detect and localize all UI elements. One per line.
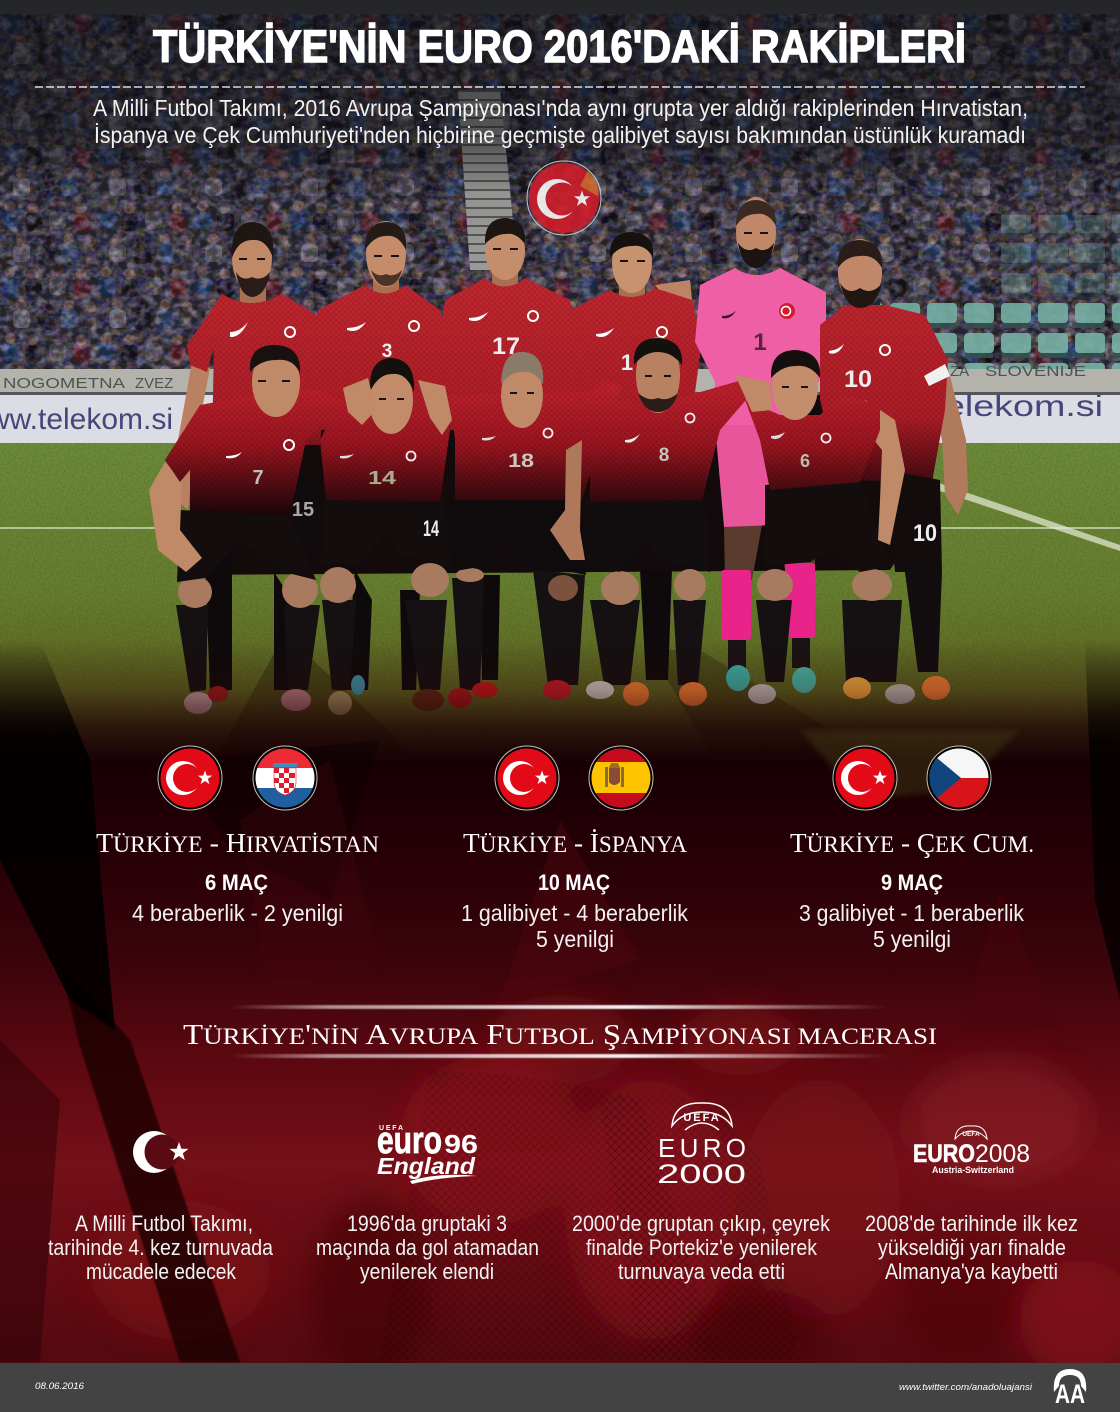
player: front row 2 <box>320 358 452 690</box>
history text: 2008: Almanya'ya kaybetti <box>885 1259 1058 1284</box>
flag: Spain <box>589 746 653 810</box>
flag: Turkey <box>158 746 222 810</box>
logo: UEFA Euro 2000: 2000 <box>657 1159 746 1189</box>
logo: UEFA Euro 96 England: 96 <box>444 1129 478 1159</box>
history text: Turkey: A Milli Futbol Takımı, <box>75 1211 253 1236</box>
history text: 1996 <box>316 1211 539 1284</box>
player: back row 2 <box>317 221 444 430</box>
player: goalkeeper in pink: 1 <box>753 329 767 356</box>
heading: TÜRKİYE - ÇEK CUM. <box>790 828 1034 858</box>
history text: Turkey: tarihinde 4. kez turnuvada <box>48 1235 274 1260</box>
results: 4 beraberlik - 2 yenilgi <box>132 900 343 926</box>
central Turkish flag badge <box>527 161 601 235</box>
player: goalkeeper in pink <box>695 197 826 670</box>
advertising boards: SLOVENIJE <box>985 363 1086 380</box>
stadium photo background <box>0 0 1120 783</box>
logo: UEFA Euro 96 England: UEFA <box>379 1125 403 1132</box>
match count: 6 MAÇ <box>205 870 268 895</box>
player: back row 4 <box>570 232 700 406</box>
player: back row 3 <box>438 218 577 430</box>
faded player silhouettes <box>90 995 1120 1380</box>
player: front row 1 <box>149 345 342 692</box>
results: 3 galibiyet - 1 beraberlik <box>799 900 1024 926</box>
intro text: İspanya ve Çek Cumhuriyeti'nden hiçbirine geçmişte galibiyet sayısı bakımından üstünlük kuramadı <box>94 122 1026 148</box>
intro text: A Milli Futbol Takımı, 2016 Avrupa Şampiyonası'nda aynı grupta yer aldığı rakiplerinden Hırvatistan, <box>93 95 1028 121</box>
match count: 9 MAÇ <box>881 870 943 895</box>
history text: 1996: 1996'da gruptaki 3 <box>347 1211 507 1236</box>
logo: Anadolu Agency <box>1054 1369 1086 1409</box>
player shorts number: rear left <box>293 502 314 516</box>
dashed divider <box>35 86 1085 88</box>
logo: UEFA Euro 2000: EURO <box>658 1133 746 1163</box>
logo: UEFA Euro 2008 <box>913 1126 1030 1176</box>
match column: Türkiye - İspanya: 5 yenilgi <box>536 926 614 952</box>
player: back row 3: 17 <box>492 333 520 360</box>
logo: UEFA Euro 2008: UEFA <box>962 1131 980 1138</box>
player: front row 5 <box>735 350 905 682</box>
advertising boards: .telekom.si <box>923 390 1103 423</box>
logo: UEFA Euro 2000 <box>657 1103 746 1189</box>
advertising boards: NOGOMETNA <box>3 375 125 392</box>
logo: UEFA Euro 2008: 2008 <box>975 1140 1030 1168</box>
match column: Türkiye - Çek Cum. <box>790 746 1034 952</box>
history text: 2000: finalde Portekiz'e yenilerek <box>586 1235 818 1260</box>
section heading: TÜRKİYE 'NİN AVRUPA FUTBOL ŞAMPİYONASI MACERASI <box>183 1020 937 1051</box>
player: front row 4: 8 <box>659 445 669 466</box>
intro text <box>93 95 1028 148</box>
player: front row 2: 14 <box>368 468 396 488</box>
torso mass behind players <box>180 395 935 575</box>
date: 08.06.2016 <box>35 1381 85 1392</box>
flag: Czech Republic <box>925 746 991 810</box>
logo: Anadolu Agency: AA <box>1055 1379 1085 1409</box>
player: back row 1 <box>176 222 328 510</box>
player: back row captain <box>820 239 968 672</box>
player: front row 2: 14 <box>423 516 439 541</box>
history text: 1996: yenilerek elendi <box>360 1259 494 1284</box>
football boots row <box>184 665 950 715</box>
player: front row 4 <box>585 337 746 685</box>
results: 1 galibiyet - 4 beraberlik <box>461 900 688 926</box>
heading: TÜRKİYE - İSPANYA <box>463 828 687 858</box>
match count: 10 MAÇ <box>538 870 610 895</box>
crowd in the stands <box>0 0 1120 372</box>
history text: Turkey <box>48 1211 274 1284</box>
twitter url: www.twitter.com/anadoluajansi <box>899 1382 1033 1393</box>
logo: UEFA Euro 96 England <box>377 1120 478 1184</box>
advertising boards: ZA <box>950 363 969 380</box>
player: front row 1: 7 <box>252 467 264 489</box>
advertising boards: ZVEZ <box>135 375 173 392</box>
logo: UEFA Euro 2008: EURO <box>913 1140 975 1168</box>
history text: Turkey: mücadele edecek <box>86 1259 237 1284</box>
match column: Türkiye - Hırvatistan <box>96 746 379 926</box>
logo: UEFA Euro 2000: UEFA <box>683 1112 721 1124</box>
player: front row 5: 6 <box>800 451 810 471</box>
match column: Türkiye - İspanya <box>461 746 688 952</box>
match column: Türkiye - Çek Cum.: 5 yenilgi <box>873 926 951 952</box>
advertising boards <box>0 363 1120 444</box>
player shorts number: rear left: 15 <box>292 499 314 521</box>
player: back row 4: 1 <box>621 350 633 375</box>
history text: 2008 <box>865 1211 1078 1284</box>
footer bar <box>0 1363 1120 1412</box>
history text: 2008: yükseldiği yarı finalde <box>878 1235 1066 1260</box>
logo: UEFA Euro 2008: Austria-Switzerland <box>932 1165 1014 1176</box>
football pitch <box>0 443 1120 783</box>
history text: 2000 <box>572 1211 831 1284</box>
lower red background with faded silhouettes <box>0 640 1120 1380</box>
player: back row captain: 10 <box>844 366 872 393</box>
flag: Turkey <box>833 746 897 810</box>
history text: 2008: 2008'de tarihinde ilk kez <box>865 1211 1078 1236</box>
player: front row 3: 18 <box>508 451 534 472</box>
title: TÜRKİYE'NİN EURO 2016'DAKİ RAKİPLERİ <box>153 21 966 72</box>
logo: UEFA Euro 96 England: England <box>377 1153 476 1179</box>
history text: 2000: 2000'de gruptan çıkıp, çeyrek <box>572 1211 831 1236</box>
player: front row 3 <box>450 352 622 690</box>
icon: Turkish crescent and star <box>133 1131 188 1173</box>
history text: 1996: maçında da gol atamadan <box>316 1235 539 1260</box>
team photo <box>149 197 968 715</box>
flag: Croatia <box>253 746 317 810</box>
dark angular shards <box>0 640 1120 1362</box>
flag: Turkey <box>495 746 559 810</box>
logo: UEFA Euro 96 England: euro <box>377 1120 442 1162</box>
player: back row captain: 10 <box>913 520 937 547</box>
player: back row 2: 3 <box>382 341 392 362</box>
back row players <box>176 197 968 672</box>
front row players <box>149 337 905 692</box>
history text: 2000: turnuvaya veda etti <box>618 1259 785 1284</box>
heading: TÜRKİYE - HIRVATİSTAN <box>96 828 379 858</box>
